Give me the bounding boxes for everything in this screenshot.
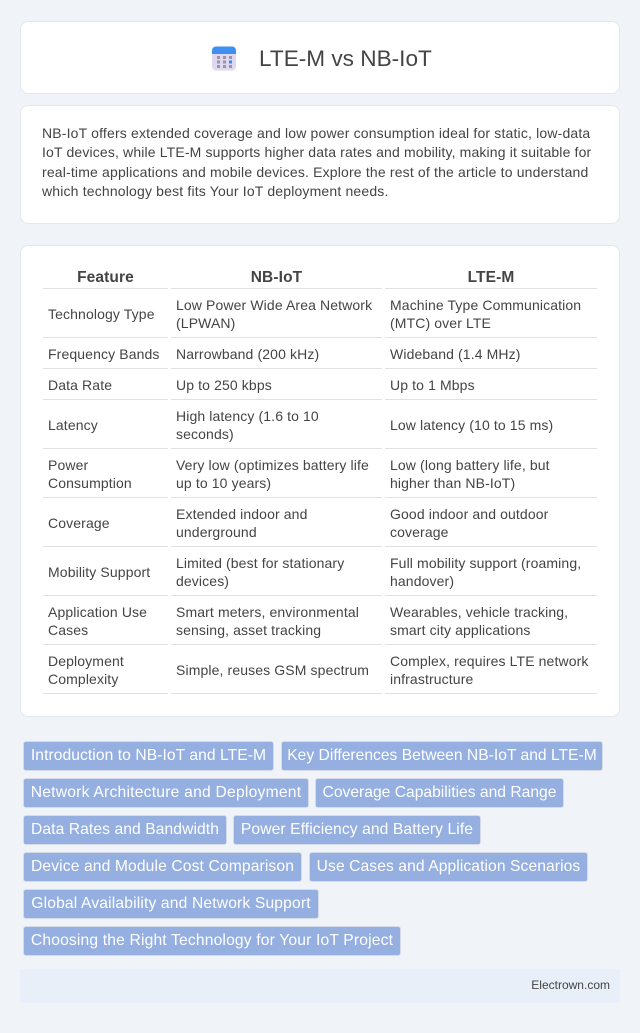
tag — [23, 815, 227, 845]
comparison table: smart city applications — [390, 622, 530, 638]
intro text: NB-IoT offers extended coverage and low power consumption ideal for static, low-data — [42, 125, 590, 141]
comparison table: Low (long battery life, but — [390, 457, 550, 473]
comparison table: handover) — [390, 573, 454, 589]
comparison table: NB-IoT — [251, 269, 302, 286]
comparison table: LTE-M — [468, 269, 514, 286]
comparison table: Machine Type Communication — [390, 297, 581, 313]
tag — [23, 889, 319, 919]
comparison table: sensing, asset tracking — [176, 622, 321, 638]
comparison table: Technology Type — [48, 306, 155, 322]
comparison table: Wearables, vehicle tracking, — [390, 604, 568, 620]
comparison table: Narrowband (200 kHz) — [176, 346, 319, 362]
tag — [23, 778, 309, 808]
comparison table: Wideband (1.4 MHz) — [390, 346, 521, 362]
intro text: IoT devices, while LTE-M supports higher data rates and mobility, making it suitable for — [42, 144, 591, 160]
comparison table: Limited (best for stationary — [176, 555, 344, 571]
intro text: which technology best fits Your IoT deployment needs. — [42, 183, 389, 199]
tag — [281, 741, 603, 771]
tag — [315, 778, 564, 808]
tag — [233, 815, 481, 845]
comparison table: up to 10 years) — [176, 475, 271, 491]
comparison table: Cases — [48, 622, 88, 638]
footer credit: Electrown.com — [531, 978, 610, 992]
tag: Coverage Capabilities and Range — [323, 784, 556, 801]
comparison table: Low latency (10 to 15 ms) — [390, 417, 553, 433]
comparison table: Up to 250 kbps — [176, 377, 272, 393]
comparison table: Low Power Wide Area Network — [176, 297, 372, 313]
intro text — [42, 125, 591, 199]
tag: Key Differences Between NB-IoT and LTE-M — [287, 747, 597, 764]
comparison table: seconds) — [176, 426, 234, 442]
comparison table: Consumption — [48, 475, 132, 491]
comparison table: Smart meters, environmental — [176, 604, 359, 620]
tag: Use Cases and Application Scenarios — [317, 858, 580, 875]
tag — [23, 926, 401, 956]
comparison table: Extended indoor and — [176, 506, 308, 522]
comparison table: (MTC) over LTE — [390, 315, 491, 331]
comparison table: Frequency Bands — [48, 346, 160, 362]
comparison table: devices) — [176, 573, 229, 589]
tag — [23, 852, 302, 882]
tag: Introduction to NB-IoT and LTE-M — [31, 747, 266, 764]
comparison table: Application Use — [48, 604, 147, 620]
comparison table: Latency — [48, 417, 98, 433]
comparison table: Data Rate — [48, 377, 112, 393]
comparison table: Feature — [77, 269, 134, 286]
comparison table: (LPWAN) — [176, 315, 235, 331]
comparison table: Full mobility support (roaming, — [390, 555, 581, 571]
comparison table: Simple, reuses GSM spectrum — [176, 662, 369, 678]
tag: Network Architecture and Deployment — [31, 784, 301, 801]
tag — [23, 741, 274, 771]
panel: intro — [20, 105, 620, 224]
tag: Device and Module Cost Comparison — [31, 858, 294, 875]
comparison table — [43, 269, 597, 694]
comparison table: Coverage — [48, 515, 110, 531]
comparison table: coverage — [390, 524, 449, 540]
intro text: real-time applications and mobile devices. Explore the rest of the article to understand — [42, 164, 588, 180]
comparison table: Deployment — [48, 653, 124, 669]
comparison table: Good indoor and outdoor — [390, 506, 548, 522]
tag: Data Rates and Bandwidth — [31, 821, 219, 838]
comparison table: Mobility Support — [48, 564, 150, 580]
panel: comparison table — [20, 245, 620, 717]
tag: Choosing the Right Technology for Your IoT Project — [31, 932, 393, 949]
comparison table: Complex, requires LTE network — [390, 653, 589, 669]
tag — [309, 852, 588, 882]
topic tags — [23, 741, 603, 956]
comparison table: underground — [176, 524, 257, 540]
comparison table: higher than NB-IoT) — [390, 475, 515, 491]
comparison table: High latency (1.6 to 10 — [176, 408, 319, 424]
comparison table: Complexity — [48, 671, 118, 687]
comparison table: Power — [48, 457, 88, 473]
footer — [20, 969, 620, 1003]
tag: Global Availability and Network Support — [31, 895, 311, 912]
comparison table: Very low (optimizes battery life — [176, 457, 369, 473]
header card — [20, 21, 620, 94]
tag: Power Efficiency and Battery Life — [241, 821, 473, 838]
comparison table: Up to 1 Mbps — [390, 377, 475, 393]
comparison table: infrastructure — [390, 671, 473, 687]
title: LTE-M vs NB-IoT — [259, 46, 432, 71]
icon: calendar grid — [212, 46, 236, 70]
